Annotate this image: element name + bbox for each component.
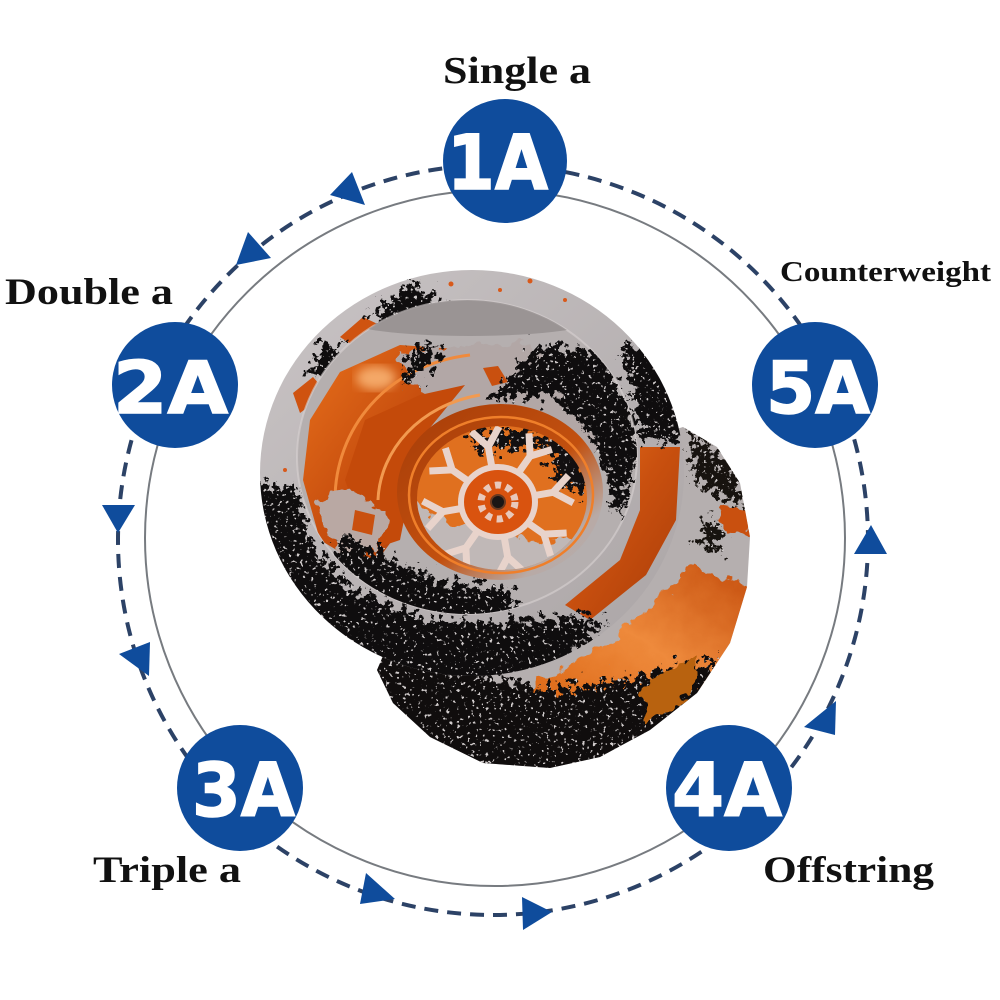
right orange band — [565, 447, 680, 620]
direction arrows — [102, 172, 887, 930]
node 4A — [666, 725, 792, 851]
orange rim patches — [293, 318, 376, 413]
node 3A: 3A — [192, 748, 295, 834]
label: Counterweight: Counterweight — [780, 257, 992, 288]
node 2A: 2A — [113, 346, 228, 430]
node 5A — [752, 322, 878, 448]
node 1A — [443, 99, 567, 223]
inner solid ring — [145, 190, 845, 886]
bowl orange splash — [483, 366, 508, 386]
outer dashed ring — [118, 165, 868, 915]
bowl orange wall — [303, 345, 448, 558]
node 1A: 1A — [447, 118, 548, 207]
node 4A: 4A — [672, 748, 782, 834]
yo-yo front rim — [260, 270, 684, 676]
yo-yo centre plate — [417, 426, 587, 570]
yo-yo photo illustration — [245, 270, 755, 790]
label: Offstring: Offstring — [763, 850, 935, 891]
bowl black paint — [330, 345, 640, 620]
bowl silver lower left — [315, 490, 390, 560]
black rim paint — [260, 278, 680, 676]
yo-yo hub recess — [397, 404, 603, 580]
bowl orange inner wall — [345, 385, 465, 550]
plate spokes — [423, 427, 573, 577]
yo-yo back disc — [377, 427, 750, 768]
label: Double a: Double a — [5, 272, 173, 313]
axle — [491, 495, 505, 509]
bowl silver shoulder — [400, 340, 600, 470]
node 3A — [177, 725, 303, 851]
yo-yo bowl — [297, 300, 637, 614]
label: Triple a: Triple a — [93, 850, 241, 891]
bowl orange splash lower left — [352, 510, 375, 535]
orange rim flecks — [283, 278, 567, 472]
bowl orange highlight — [356, 366, 396, 390]
label: Single a: Single a — [443, 50, 591, 92]
node 2A — [112, 322, 238, 448]
node 5A: 5A — [766, 346, 870, 430]
